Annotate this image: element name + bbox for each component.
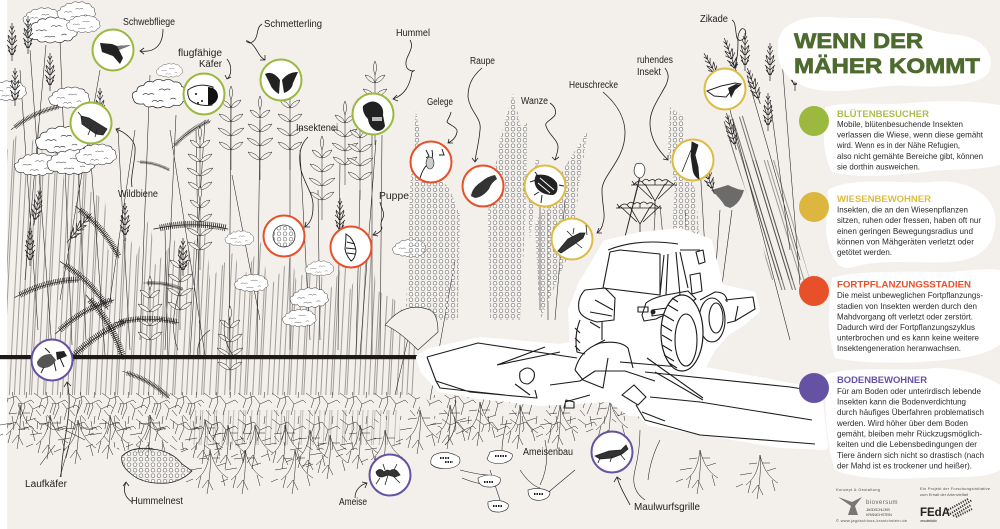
section: Blütenbesucher: sie dorthin ausweichen. bbox=[837, 162, 920, 172]
dot yellow bbox=[799, 192, 829, 222]
insect: Insektenei bbox=[264, 216, 304, 256]
section: Wiesenbewohner: getötet werden. bbox=[837, 247, 892, 257]
front wheel bbox=[661, 295, 703, 371]
section: Bodenbewohner: Insekten kann die Bodenverdichtung bbox=[837, 397, 966, 407]
section: Fortpflanzungsstadien bbox=[799, 276, 983, 353]
insect: Zikade bbox=[704, 68, 746, 110]
label: Gelege: Gelege bbox=[427, 97, 453, 108]
label: Insektenei: Insektenei bbox=[296, 123, 338, 134]
mower right bbox=[636, 372, 815, 444]
illustration: roots and soil bbox=[0, 392, 778, 499]
credits: KRANICHSTEIN bbox=[866, 512, 892, 517]
label: Käfer: Käfer bbox=[199, 59, 223, 70]
insect: Wanze bbox=[524, 166, 566, 206]
insect: Hummel bbox=[352, 94, 394, 134]
section: Blütenbesucher: verlassen die Wiese, wenn diese gemäht bbox=[837, 130, 984, 140]
mower linkage bbox=[520, 342, 703, 408]
insect: Raupe bbox=[462, 166, 504, 206]
credits: © www.jagdschloss-kranichstein.de bbox=[836, 518, 908, 523]
rear wheel bbox=[699, 292, 755, 342]
section: Bodenbewohner: keiten und die Lebensbedingungen der bbox=[837, 439, 977, 449]
section: Wiesenbewohner: einen geringen Bewegungsradius und bbox=[837, 226, 973, 236]
section: Bodenbewohner bbox=[799, 373, 984, 470]
logo: bioversum bbox=[838, 497, 862, 515]
section: Blütenbesucher: wird. Wenn es in der Nähe Refugien, bbox=[836, 140, 960, 150]
dot red bbox=[799, 276, 829, 306]
dot green bbox=[799, 106, 829, 136]
label: Hummel: Hummel bbox=[396, 28, 430, 39]
insect: Heuschrecke bbox=[552, 218, 592, 260]
right white blobs bbox=[778, 17, 1000, 479]
arrows bbox=[61, 20, 746, 505]
section: Wiesenbewohner: können von Mähgeräten verletzt oder bbox=[837, 237, 974, 247]
Ameisenbau bbox=[431, 400, 660, 512]
section: Fortpflanzungsstadien: Die meist unbeweglichen Fortpflanzungs- bbox=[837, 290, 983, 300]
section: Wiesenbewohner: WIESENBEWOHNER bbox=[837, 193, 931, 204]
dot purple bbox=[799, 373, 829, 403]
label: Wanze: Wanze bbox=[521, 96, 548, 107]
label: Schwebfliege: Schwebfliege bbox=[123, 17, 175, 28]
insect: Schmetterling bbox=[260, 60, 302, 100]
label: Zikade: Zikade bbox=[700, 14, 728, 25]
logo dots bbox=[948, 499, 972, 517]
label: Insekt: Insekt bbox=[637, 67, 661, 78]
section: Blütenbesucher: BLÜTENBESUCHER bbox=[837, 108, 929, 119]
section: Fortpflanzungsstadien: FORTPFLANZUNGSSTADIEN bbox=[837, 278, 971, 290]
credits: Ein Projekt der Forschungsinitiative bbox=[920, 486, 991, 491]
section: Bodenbewohner: Tiere ändern sich nicht so drastisch (nach bbox=[837, 450, 984, 460]
tractor with mower bbox=[420, 232, 824, 446]
section: Wiesenbewohner: sitzen, ruhen oder fressen, haben oft nur bbox=[837, 215, 981, 225]
Hummelnest bbox=[122, 448, 192, 483]
panel blob: Bodenbewohner bbox=[825, 368, 1000, 479]
section: Bodenbewohner: der Mahd ist es trockener und heißer). bbox=[837, 460, 972, 470]
label: Maulwurfsgrille: Maulwurfsgrille bbox=[634, 502, 700, 513]
section: Blütenbesucher: also nicht gemähte Bereiche gibt, können bbox=[837, 151, 983, 161]
insect: Laufkäfer bbox=[32, 340, 72, 380]
logo: FEdA: FEdA bbox=[920, 507, 950, 519]
title: WENN DER bbox=[794, 29, 924, 53]
credits bbox=[836, 486, 991, 523]
section: Fortpflanzungsstadien: unterbrochen und es kann keine weitere bbox=[837, 332, 979, 342]
label: flugfähige: flugfähige bbox=[178, 48, 222, 59]
rear-left tyre bbox=[575, 320, 605, 354]
label: Schmetterling: Schmetterling bbox=[264, 19, 322, 30]
label: Ameisenbau: Ameisenbau bbox=[523, 447, 573, 458]
section: Wiesenbewohner: Insekten, die an den Wiesenpflanzen bbox=[837, 205, 968, 215]
cab bbox=[603, 242, 705, 295]
insect: flugfähiger Käfer bbox=[184, 74, 224, 114]
credits: zum Erhalt der Artenvielfalt bbox=[920, 492, 969, 497]
credits: bioversum bbox=[866, 500, 898, 506]
insect: Ameise bbox=[370, 454, 410, 496]
section: Bodenbewohner: BODENBEWOHNER bbox=[837, 374, 927, 385]
insect: Gelege bbox=[410, 142, 452, 182]
section: Fortpflanzungsstadien: stadien von Insekten werden durch den bbox=[837, 301, 977, 311]
section: Fortpflanzungsstadien: Mahdvorgang oft verletzt oder zerstört. bbox=[837, 312, 973, 322]
insect: Schwebfliege bbox=[92, 30, 134, 70]
panel blob: Blütenbesucher bbox=[824, 101, 1000, 176]
title bbox=[794, 29, 980, 78]
section: Bodenbewohner: werden. Wird höher über dem Boden bbox=[836, 418, 968, 428]
insect: Maulwurfsgrille bbox=[592, 432, 632, 472]
insect: Puppe bbox=[330, 226, 372, 268]
section: Fortpflanzungsstadien: Dadurch wird der Fortpflanzungszyklus bbox=[837, 322, 975, 332]
label: Raupe: Raupe bbox=[470, 56, 495, 67]
mower left bbox=[427, 343, 577, 398]
section: Blütenbesucher bbox=[799, 106, 984, 172]
hood bbox=[638, 273, 702, 321]
section: Wiesenbewohner bbox=[799, 192, 981, 257]
label: Hummelnest: Hummelnest bbox=[131, 496, 183, 507]
credits: Konzept & Gestaltung bbox=[836, 487, 880, 492]
ground line bbox=[0, 355, 417, 359]
label: Laufkäfer: Laufkäfer bbox=[25, 479, 68, 490]
section: Fortpflanzungsstadien: Insektengeneration heranwachsen. bbox=[837, 343, 961, 353]
label: Puppe: Puppe bbox=[379, 191, 409, 202]
halo bbox=[420, 232, 824, 446]
section: Bodenbewohner: durch häufiges Überfahren problematisch bbox=[837, 407, 984, 417]
label: Heuschrecke: Heuschrecke bbox=[569, 80, 618, 91]
label: Ameise: Ameise bbox=[339, 497, 367, 508]
fender bbox=[579, 288, 615, 322]
section: Blütenbesucher: Mobile, blütenbesuchende Insekten bbox=[837, 119, 963, 129]
panel blob: Fortpflanzungsstadien bbox=[829, 269, 1000, 363]
title blob bbox=[778, 17, 991, 91]
credits: www.feda.bio bbox=[920, 518, 938, 523]
section: Bodenbewohner: Für am Boden oder unterirdisch lebende bbox=[837, 386, 981, 396]
credits: JAGDSCHLOSS bbox=[866, 507, 890, 512]
insect: ruhendes Insekt bbox=[672, 140, 714, 180]
panel blob: Wiesenbewohner bbox=[826, 181, 995, 268]
insect: Wildbiene bbox=[70, 102, 112, 144]
label: Wildbiene: Wildbiene bbox=[118, 189, 158, 200]
label: ruhendes: ruhendes bbox=[637, 55, 673, 66]
title: MÄHER KOMMT bbox=[794, 54, 980, 78]
illustration: meadow plants bbox=[0, 2, 810, 400]
section: Bodenbewohner: gemäht, bleiben mehr Rückzugsmöglich- bbox=[837, 429, 982, 439]
